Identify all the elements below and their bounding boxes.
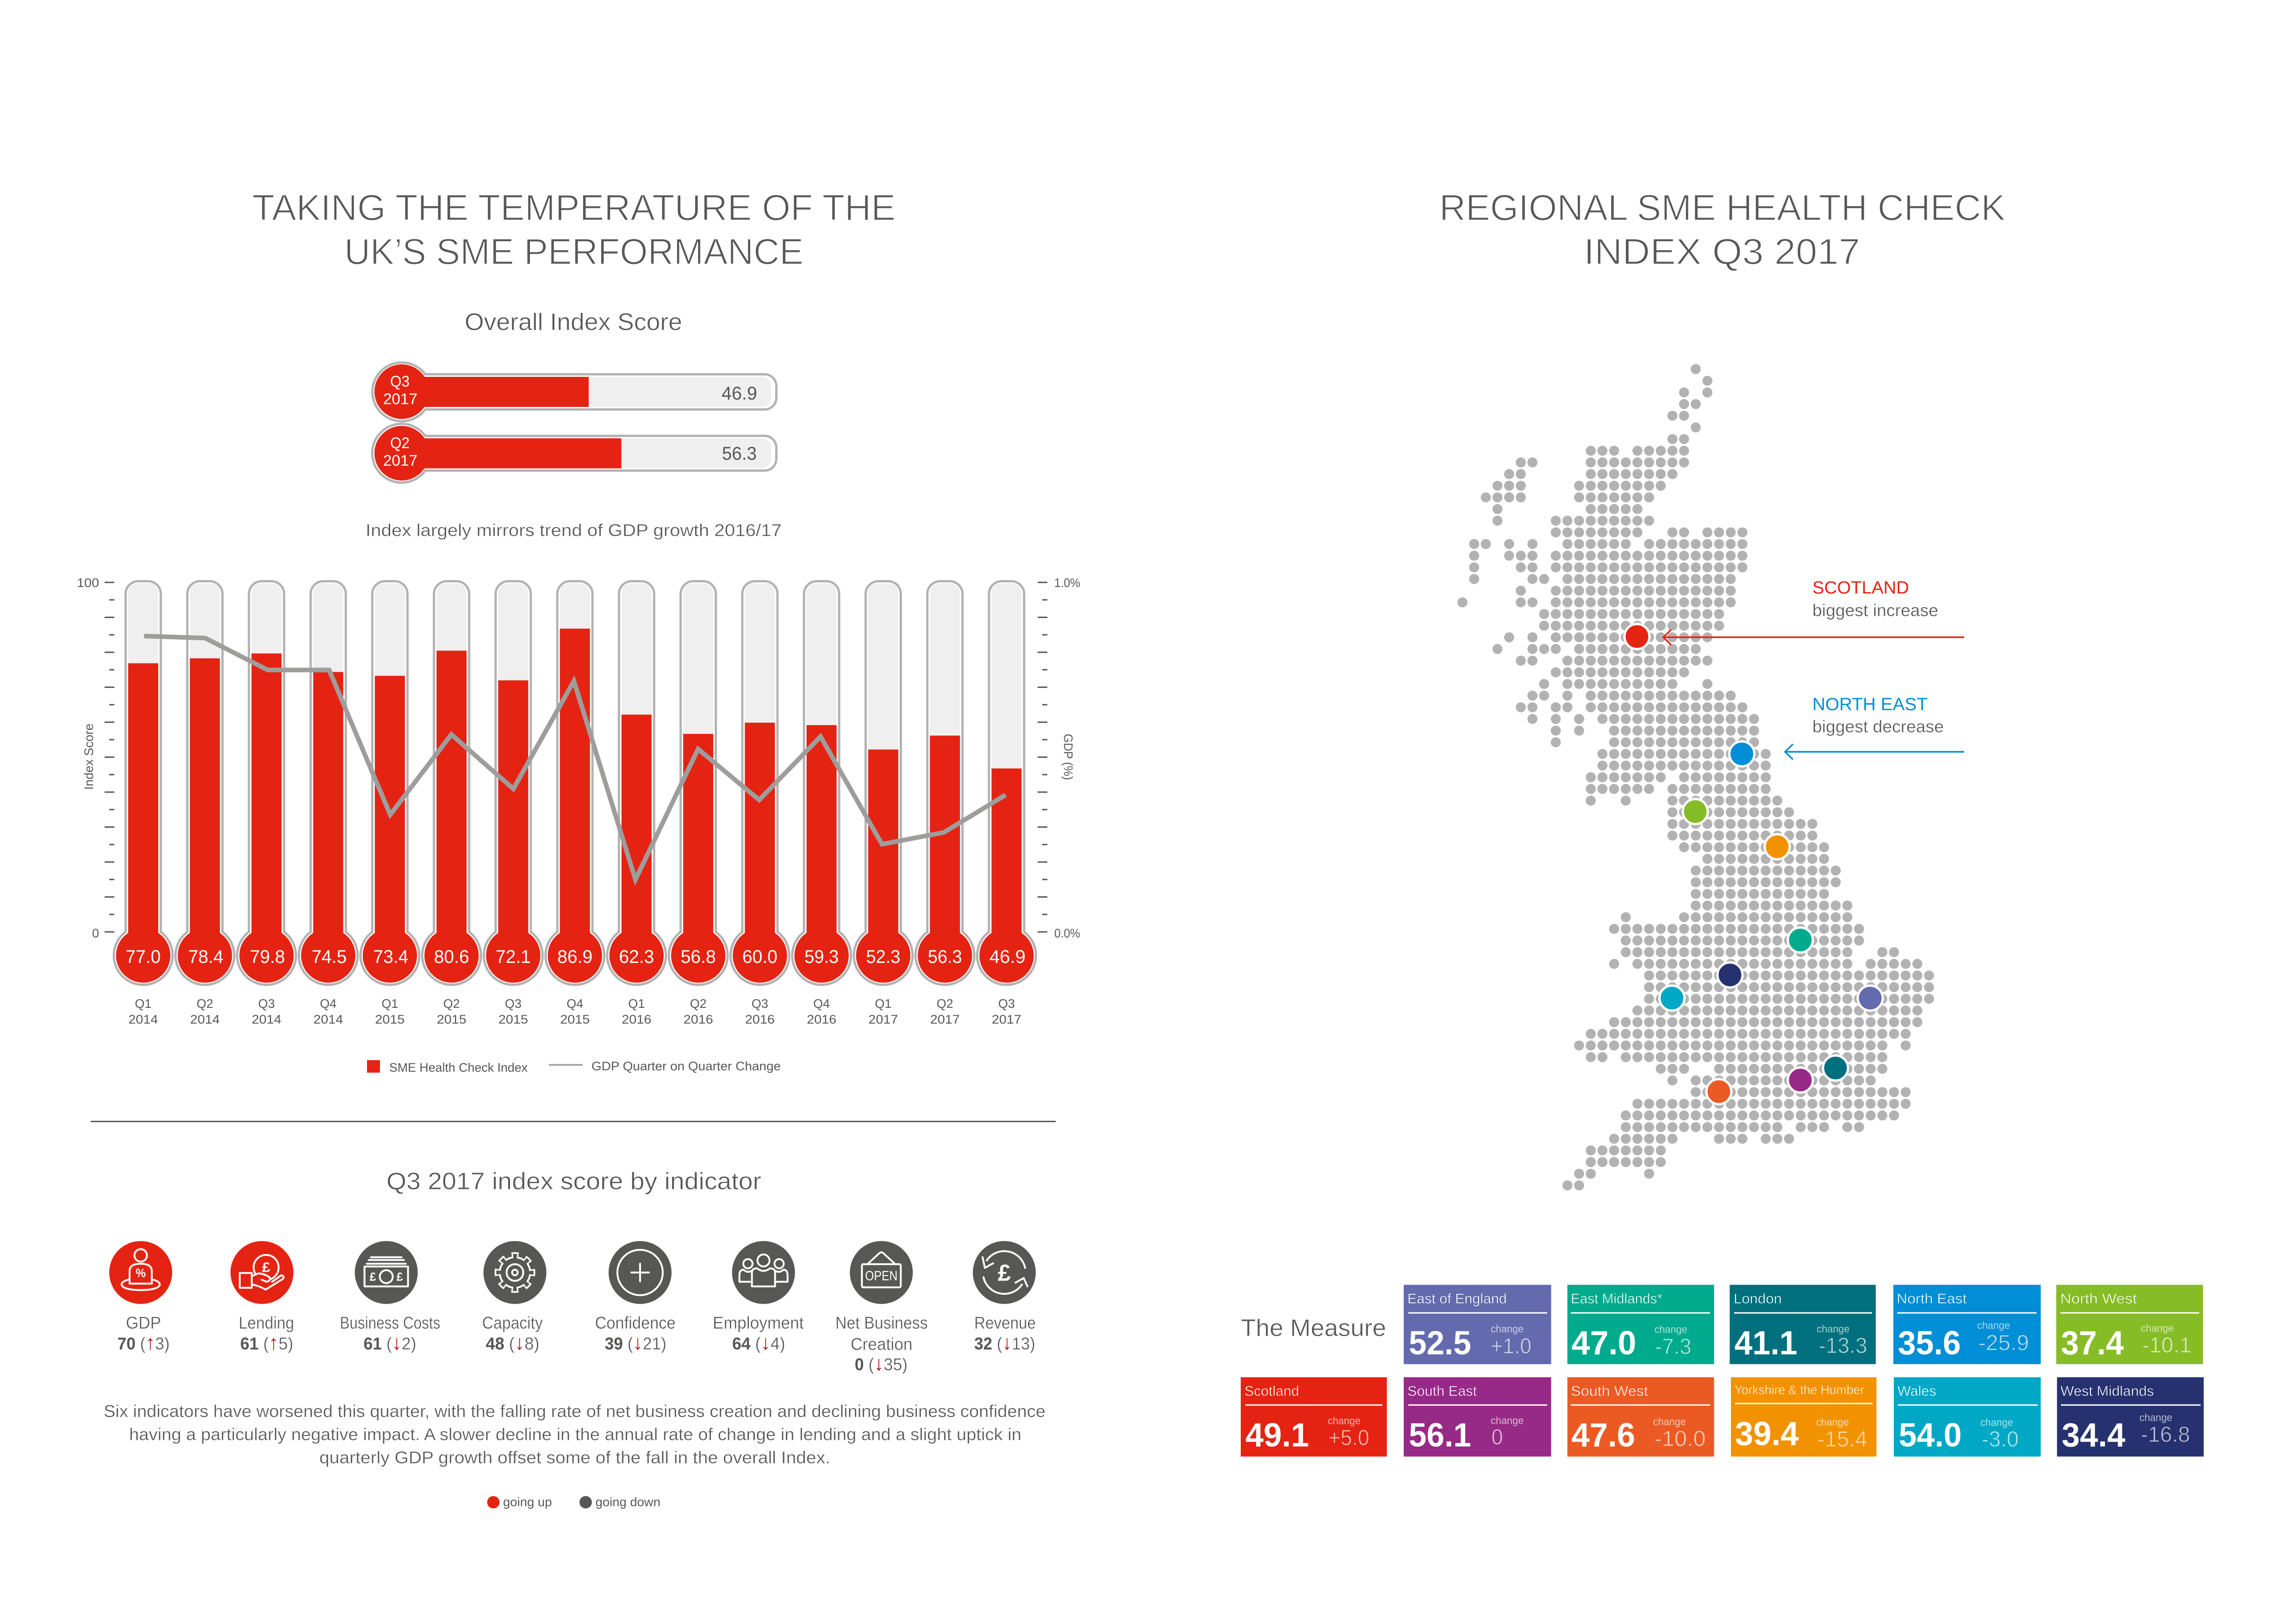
bar: Q2 2014: [175, 581, 234, 1026]
heading: overall index score: Overall Index Score: [465, 309, 682, 336]
card: North East: 35.6: [1898, 1325, 1961, 1362]
card: West Midlands: change: [2140, 1412, 2172, 1423]
indicator: Net Business Creation: OPEN: [865, 1269, 897, 1284]
marker: East of England: [1858, 986, 1883, 1011]
bar: Q2 2017: 2017: [930, 1012, 960, 1026]
bar: Q1 2017: 52.3: [866, 947, 900, 967]
bar: Q2 2017: Q2: [937, 997, 953, 1011]
card: East Midlands: [1568, 1285, 1714, 1364]
card: London: [1730, 1285, 1876, 1364]
right axis: 0.0%: [1054, 926, 1080, 940]
thermometer: Q3 2017: 46.9: [722, 383, 757, 404]
region markers: [1624, 624, 1883, 1104]
bar: Q1 2017: Q1: [875, 997, 891, 1011]
text block: commentary: having a particularly negative impact. A slower decline in the annual rate of change in lending and a slight uptick in: [129, 1425, 1021, 1444]
bar: Q1 2015: 73.4: [373, 947, 408, 967]
card: Scotland: Scotland: [1244, 1383, 1299, 1399]
bar: Q3 2016: [730, 581, 789, 1026]
text block: commentary: Six indicators have worsened this quarter, with the falling rate of net business creation and declining business confidence: [104, 1402, 1045, 1421]
card: Yorkshire and the Humber: -15.4: [1817, 1427, 1867, 1451]
bar: Q3 2017: 2017: [992, 1012, 1021, 1026]
bar: Q1 2014: Q1: [135, 997, 151, 1011]
thermometer: Q3 2017: Q3: [390, 373, 410, 390]
text block: commentary: [104, 1402, 1045, 1467]
callout: North East biggest decrease: NORTH EAST: [1812, 695, 1928, 714]
card: South West: 47.6: [1572, 1417, 1635, 1454]
card: North West: [2056, 1285, 2203, 1364]
card: Wales: -3.0: [1982, 1427, 2019, 1451]
indicator: Revenue: [973, 1241, 1036, 1354]
card: London: London: [1734, 1291, 1782, 1307]
thermometer: Q2 2017: Q2: [390, 434, 410, 451]
callout: North East biggest decrease: [1785, 695, 1964, 759]
bar: Q1 2017: 2017: [868, 1012, 898, 1026]
bar: Q4 2014: [299, 581, 358, 1026]
title: regional health check: REGIONAL SME HEALTH CHECK: [1439, 187, 2005, 228]
marker: Wales: [1660, 986, 1685, 1011]
indicator: GDP: %: [136, 1266, 146, 1280]
indicator: Net Business Creation: [835, 1241, 928, 1375]
card: South West: South West: [1571, 1383, 1648, 1399]
bar: Q4 2014: 74.5: [311, 947, 347, 967]
legend: chart: GDP Quarter on Quarter Change: [591, 1059, 781, 1073]
bar: Q2 2014: Q2: [197, 997, 213, 1011]
thermometer: Q3 2017: 2017: [383, 390, 417, 407]
bar: Q4 2016: Q4: [813, 997, 830, 1011]
bar: Q3 2015: 72.1: [496, 947, 531, 967]
panel: overall index thermometers: [372, 362, 777, 482]
marker: North East: [1730, 742, 1755, 767]
thermometer: Q2 2017: 56.3: [722, 443, 757, 464]
marker: South East: [1788, 1068, 1813, 1093]
callout: Scotland biggest increase: SCOTLAND: [1812, 578, 1909, 598]
indicator: Confidence: Confidence: [595, 1313, 676, 1332]
marker: West Midlands: [1717, 962, 1742, 987]
card: Wales: change: [1980, 1417, 2013, 1428]
card: South East: change: [1491, 1415, 1524, 1426]
callout: Scotland biggest increase: biggest increase: [1812, 601, 1938, 620]
card: West Midlands: West Midlands: [2060, 1383, 2154, 1399]
bar: Q2 2015: 2015: [437, 1012, 467, 1026]
callout: North East biggest decrease: biggest decrease: [1812, 717, 1944, 736]
indicator: GDP: GDP: [126, 1313, 161, 1332]
map: dotted UK: [1462, 369, 1929, 1186]
indicator: Employment: Employment: [713, 1313, 804, 1332]
marker: London: [1823, 1056, 1848, 1081]
card: South East: South East: [1407, 1383, 1477, 1399]
indicator: Capacity: 48 (↓8): [486, 1331, 540, 1354]
bar: Q4 2016: 59.3: [804, 947, 839, 967]
bar: Q4 2016: 2016: [807, 1012, 836, 1026]
card: Yorkshire and the Humber: 39.4: [1735, 1416, 1798, 1453]
indicator: Net Business Creation: 0 (↓35): [855, 1352, 908, 1375]
bar: Q1 2016: [607, 581, 666, 1026]
bar: Q3 2015: 2015: [498, 1012, 528, 1026]
bar: Q3 2014: 79.8: [250, 947, 285, 967]
indicator: Business Costs: £: [370, 1271, 376, 1284]
bar: Q1 2014: 77.0: [125, 947, 161, 967]
card: London: -13.3: [1819, 1333, 1867, 1358]
indicator: Confidence: [595, 1241, 676, 1354]
card: Yorkshire and the Humber: [1731, 1377, 1876, 1456]
card: Wales: Wales: [1898, 1383, 1936, 1399]
legend: indicators: going up: [503, 1495, 552, 1509]
card: West Midlands: 34.4: [2062, 1417, 2125, 1454]
bar: Q4 2015: Q4: [566, 997, 583, 1011]
indicator: Capacity: [482, 1241, 547, 1354]
right axis: [1038, 576, 1080, 940]
card: East of England: +1.0: [1491, 1333, 1531, 1358]
bar: Q2 2016: 2016: [684, 1012, 713, 1026]
card: East of England: change: [1491, 1323, 1524, 1335]
title: taking the temperature: TAKING THE TEMPERATURE OF THE: [252, 187, 896, 228]
bar: Q2 2014: 2014: [190, 1012, 220, 1026]
card: South West: change: [1653, 1416, 1686, 1427]
card: East of England: 52.5: [1409, 1325, 1471, 1362]
card: Wales: [1894, 1377, 2041, 1456]
right axis: GDP (%): [1061, 734, 1075, 780]
bar: Q2 2015: Q2: [443, 997, 460, 1011]
legend: indicators: going down: [596, 1495, 660, 1509]
callout: Scotland biggest increase: [1663, 578, 1964, 645]
bar: Q2 2015: [422, 581, 481, 1026]
bar: Q3 2014: [237, 581, 296, 1026]
card: South West: [1568, 1377, 1714, 1456]
line: gdp quarter on quarter: [144, 636, 1006, 880]
indicator: Business Costs: Business Costs: [340, 1313, 440, 1332]
bar: Q1 2016: 62.3: [619, 947, 654, 967]
card: North West: North West: [2060, 1291, 2137, 1307]
indicator: Revenue: £: [998, 1260, 1011, 1286]
bar: Q2 2015: 80.6: [434, 947, 469, 967]
bar: Q1 2014: 2014: [128, 1012, 158, 1026]
chart: thermometer bars with gdp line: [77, 576, 1080, 1074]
card: North East: [1893, 1285, 2041, 1364]
card: North East: change: [1977, 1320, 2010, 1331]
bar: Q3 2014: 2014: [252, 1012, 281, 1026]
indicator: Revenue: 32 (↓13): [974, 1331, 1035, 1354]
subheading: index mirrors gdp: Index largely mirrors trend of GDP growth 2016/17: [366, 521, 782, 540]
card: Yorkshire and the Humber: Yorkshire & the Humber: [1735, 1383, 1864, 1397]
indicator: Confidence: 39 (↓21): [605, 1331, 666, 1354]
bar: Q3 2015: [484, 581, 542, 1026]
bar: Q1 2017: [854, 581, 913, 1026]
bar: Q3 2016: Q3: [752, 997, 768, 1011]
indicator: Employment: 64 (↓4): [732, 1331, 785, 1354]
card: North West: -10.1: [2142, 1333, 2191, 1357]
card: London: 41.1: [1735, 1325, 1798, 1362]
title: taking the temperature: [252, 187, 896, 272]
legend: chart: SME Health Check Index: [389, 1061, 528, 1074]
marker: East Midlands: [1788, 928, 1813, 953]
card: East of England: East of England: [1407, 1291, 1507, 1307]
indicator: Revenue: Revenue: [974, 1313, 1036, 1332]
bar: Q3 2017: [977, 581, 1036, 1026]
bar: Q3 2015: Q3: [505, 997, 522, 1011]
bar: Q1 2015: 2015: [375, 1012, 404, 1026]
indicator: Business Costs: 61 (↓2): [364, 1331, 417, 1354]
marker: North West: [1683, 799, 1708, 824]
card: Yorkshire and the Humber: change: [1816, 1416, 1849, 1428]
indicator: Capacity: Capacity: [482, 1313, 543, 1332]
heading: index score by indicator: Q3 2017 index score by indicator: [386, 1168, 761, 1195]
card: East Midlands: East Midlands*: [1571, 1291, 1662, 1307]
bar: Q1 2015: [361, 581, 419, 1026]
indicator: GDP: 70 (↑3): [118, 1331, 170, 1354]
card: Scotland: +5.0: [1328, 1425, 1369, 1450]
indicator: GDP: [109, 1241, 172, 1354]
marker: Yorkshire: [1765, 834, 1790, 859]
indicator: Lending: [230, 1241, 294, 1354]
card: North East: North East: [1897, 1291, 1967, 1307]
legend: indicators: [487, 1495, 660, 1509]
indicator: Employment: [713, 1241, 804, 1354]
card: North East: -25.9: [1979, 1330, 2029, 1355]
card: South East: 56.1: [1409, 1417, 1471, 1454]
marker: Scotland: [1624, 624, 1649, 649]
bar: Q4 2016: [792, 581, 851, 1026]
bar: Q1 2014: [114, 581, 173, 1026]
card: North West: change: [2141, 1323, 2174, 1334]
card: Scotland: change: [1328, 1415, 1361, 1427]
card: East Midlands: 47.0: [1572, 1325, 1636, 1362]
indicator: Business Costs: £: [397, 1271, 403, 1284]
bar: Q3 2014: Q3: [258, 997, 275, 1011]
thermometer: Q3 2017: [373, 362, 777, 421]
bar: Q1 2016: 2016: [622, 1012, 651, 1026]
card: West Midlands: -16.8: [2141, 1422, 2190, 1447]
bar: Q2 2017: [915, 581, 974, 1026]
title: regional health check: [1439, 187, 2005, 272]
title: taking the temperature: UK’S SME PERFORMANCE: [344, 231, 803, 272]
indicator: Net Business Creation: Creation: [851, 1335, 913, 1354]
bar: Q3 2016: 60.0: [742, 947, 778, 967]
bar: Q3 2017: 46.9: [989, 947, 1026, 967]
card: East of England: [1404, 1285, 1551, 1364]
bar: Q2 2014: 78.4: [188, 947, 224, 967]
bar: Q2 2017: 56.3: [928, 947, 962, 967]
bar: Q3 2017: Q3: [998, 997, 1015, 1011]
card: Scotland: 49.1: [1245, 1417, 1309, 1454]
left axis: 100: [77, 576, 99, 590]
marker: South West: [1706, 1079, 1731, 1104]
card: East Midlands: change: [1655, 1324, 1687, 1335]
panel: indicators: [109, 1241, 1036, 1375]
heading: the measure: The Measure: [1241, 1315, 1386, 1342]
bar: Q4 2014: Q4: [320, 997, 336, 1011]
card: London: change: [1817, 1323, 1849, 1335]
indicator: Lending: 61 (↑5): [240, 1331, 293, 1354]
indicator: Lending: Lending: [239, 1313, 294, 1332]
bar: Q4 2015: 2015: [560, 1012, 590, 1026]
bar: Q1 2016: Q1: [628, 997, 645, 1011]
card: North West: 37.4: [2061, 1325, 2124, 1362]
card: West Midlands: [2057, 1377, 2204, 1456]
bar: Q1 2015: Q1: [381, 997, 398, 1011]
panel: region cards: [1241, 1285, 2204, 1456]
legend: chart: [367, 1059, 781, 1074]
left axis: Index Score: [82, 724, 96, 790]
card: South East: [1404, 1377, 1551, 1456]
indicator: Business Costs: [340, 1241, 440, 1354]
bar: Q4 2015: [546, 581, 604, 1026]
thermometer: Q2 2017: 2017: [383, 452, 417, 469]
card: Wales: 54.0: [1899, 1417, 1962, 1454]
card: Scotland: [1241, 1377, 1387, 1456]
text block: commentary: quarterly GDP growth offset some of the fall in the overall Index.: [319, 1448, 830, 1467]
title: regional health check: INDEX Q3 2017: [1584, 231, 1860, 272]
left axis: [77, 576, 114, 940]
thermometer: Q2 2017: [372, 424, 777, 482]
right axis: 1.0%: [1054, 576, 1080, 590]
bar: Q2 2016: 56.8: [681, 947, 716, 967]
card: South East: 0: [1491, 1424, 1503, 1449]
card: East Midlands: -7.3: [1655, 1334, 1692, 1358]
indicator: Lending: £: [262, 1260, 270, 1275]
card: South West: -10.0: [1655, 1426, 1706, 1450]
bar: Q2 2016: [669, 581, 728, 1026]
indicator: Net Business Creation: Net Business: [835, 1313, 928, 1332]
bar: Q4 2014: 2014: [313, 1012, 343, 1026]
bar: Q3 2016: 2016: [745, 1012, 775, 1026]
bar: Q4 2015: 86.9: [557, 947, 592, 967]
bar: Q2 2016: Q2: [690, 997, 707, 1011]
left axis: 0: [92, 926, 99, 940]
